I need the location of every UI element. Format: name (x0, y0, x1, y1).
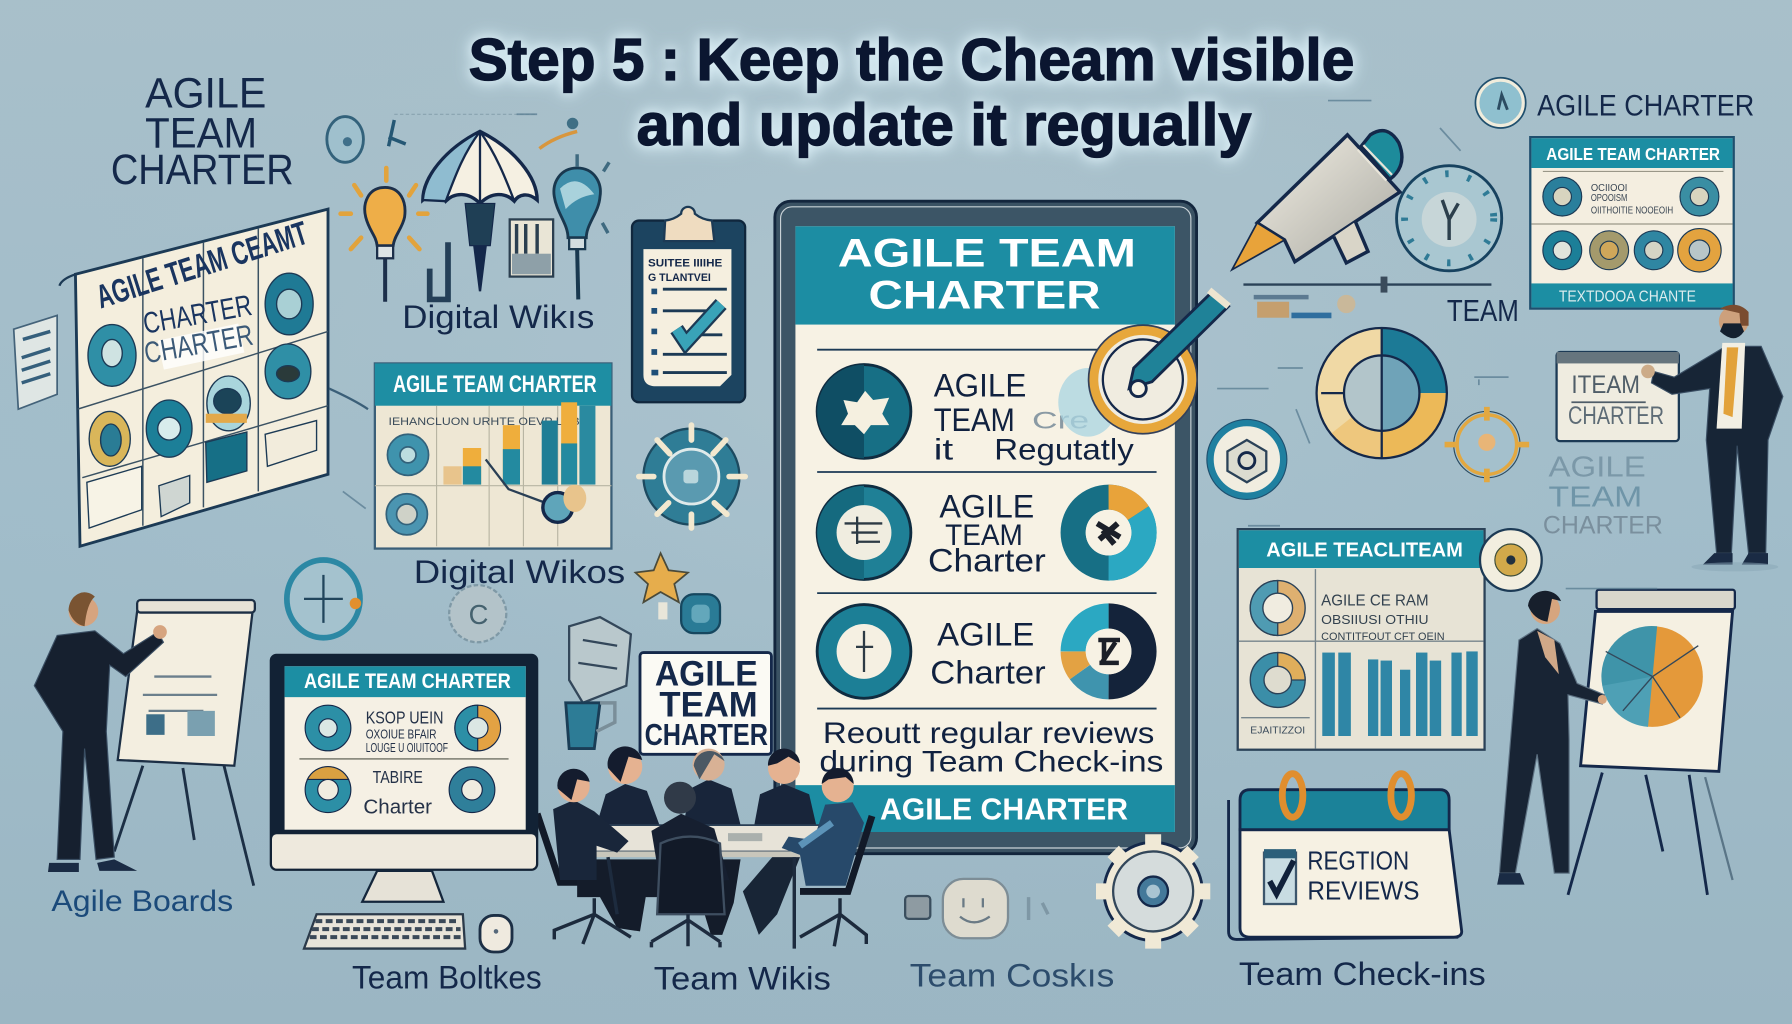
icon: compass (287, 560, 361, 638)
chairs and legs (537, 814, 872, 946)
icon: clock (1397, 166, 1502, 271)
calendar text (1307, 846, 1419, 905)
icon: keyboard (304, 914, 465, 949)
poster text (1591, 183, 1673, 217)
board header: AGILE TEAM CHARTER (393, 371, 597, 398)
tablet header (795, 226, 1175, 325)
table (577, 825, 840, 949)
report text (1321, 593, 1445, 643)
row 1: TEAM (934, 402, 1015, 438)
panel: wall poster (59, 209, 328, 546)
review text (819, 717, 1163, 778)
icon: circular target (1207, 419, 1287, 499)
monitor text: Charter (363, 796, 432, 819)
icon: teal tile (681, 594, 720, 633)
icon: agile charter badge (1475, 78, 1526, 128)
poster heading: AGILE TEAM CEAMT (92, 215, 312, 316)
label: agile charter: AGILE CHARTER (1537, 89, 1754, 122)
faded agile team charter text (1543, 452, 1663, 540)
left heading: agile team charter: TEAM (145, 109, 257, 156)
board circles (386, 434, 429, 535)
board text: IEHANCLUON URHTE OEVP LNBU (389, 416, 589, 428)
labels: bottom row (352, 956, 1486, 997)
monitor text: TABIRE (373, 767, 423, 787)
row 2: AGILE (939, 489, 1034, 525)
monitor text: KSOP UEIN (366, 707, 443, 727)
faded agile team charter text: AGILE (1549, 452, 1646, 484)
faded agile team charter text: CHARTER (1543, 512, 1663, 540)
icon: yellow light bulb (341, 168, 427, 302)
icon: pen and gold ring (1058, 290, 1229, 437)
row 2: Charter (928, 542, 1046, 578)
icon: megaphone (1232, 131, 1402, 270)
timeline with smudged marks (1243, 277, 1491, 318)
monitor text: OXOIUE BFAIR (366, 727, 437, 741)
row 1 (817, 365, 1134, 466)
poster text: OIITHOITIE NOOEOIH (1591, 206, 1673, 217)
panel: agile team sign: CHARTER (645, 717, 768, 752)
row 3: Charter (930, 654, 1046, 690)
report icons (1250, 581, 1305, 707)
report header: AGILE TEACLITEAM (1266, 539, 1463, 562)
icon: small smiley device (905, 879, 1048, 938)
poster charter text (141, 289, 256, 370)
poster charter text: CHARTER (142, 319, 256, 370)
tablet footer (795, 785, 1175, 832)
faded agile team charter text: TEAM (1549, 481, 1642, 513)
note: team charter: ITEAM (1571, 371, 1640, 399)
poster footer: TEXTDOOA CHANTE (1559, 289, 1696, 306)
flipchart left (114, 600, 255, 886)
title: Step 5 : Keep the Cheam visible (469, 26, 1354, 93)
panel: agile chart board (375, 363, 611, 549)
icon: umbrella (423, 131, 537, 291)
pie chart (1601, 626, 1703, 727)
icon: mug and gadget (566, 617, 631, 749)
labels: bottom row: Team Check-ins (1239, 956, 1486, 992)
person far left (597, 746, 663, 834)
row 3: AGILE (937, 617, 1034, 653)
calendar text: REVIEWS (1307, 875, 1419, 905)
icon: star (635, 553, 688, 619)
panel: top right poster (1530, 137, 1734, 309)
label: digital wikos: Digital Wikos (414, 554, 625, 590)
presenter left (34, 592, 167, 872)
left heading: agile team charter: AGILE (145, 69, 266, 116)
bar chart (443, 402, 595, 485)
row 1: Regutatly (994, 433, 1134, 466)
panel: desktop monitor (270, 654, 538, 902)
left heading: agile team charter: CHARTER (111, 146, 294, 193)
label: team: TEAM (1447, 293, 1519, 328)
person left (553, 769, 629, 880)
magnifier (486, 459, 586, 522)
donut chart: team (1317, 328, 1447, 458)
icon: clipboard checklist: G TLANTVEI (648, 272, 711, 284)
label: agile boards: Agile Boards (51, 885, 233, 918)
icon: gold target (1445, 407, 1529, 482)
icon: grey dial (449, 585, 506, 642)
icon: scribbled lens (327, 114, 578, 162)
labels: bottom row: Team Wikis (654, 961, 831, 997)
note: team charter (1557, 352, 1679, 441)
report text: CONTITFOUT CFT OEIN (1321, 631, 1445, 643)
presenter top right (1641, 305, 1783, 571)
icon: eye badge (1480, 529, 1542, 591)
poster icons (1543, 177, 1721, 272)
calendar: region reviews (1229, 774, 1462, 939)
panel: agile team sign (640, 653, 771, 754)
flipchart right with pie chart (1568, 590, 1735, 895)
icon: mouse (480, 915, 512, 952)
icon: grey dial: C (469, 599, 488, 630)
poster charter text: CHARTER (141, 289, 254, 341)
label: digital wikis: Digital Wikıs (402, 299, 594, 335)
review text: Reoutt regular reviews (823, 717, 1154, 750)
title (469, 26, 1354, 158)
left heading: agile team charter (111, 69, 294, 193)
team meeting table (537, 746, 872, 949)
poster header: AGILE TEAM CHARTER (1546, 144, 1721, 164)
icon: clipboard checklist (632, 207, 745, 402)
calendar text: REGTION (1307, 846, 1409, 876)
tablet footer: AGILE CHARTER (880, 791, 1128, 826)
row 2: TEAM (945, 519, 1023, 552)
row 3 (817, 605, 1144, 698)
donut chart row 3 (1073, 616, 1144, 687)
icon: blue light bulb (554, 154, 609, 299)
tablet header: CHARTER (869, 274, 1101, 318)
panel: central tablet (775, 201, 1197, 854)
person middle (683, 749, 741, 825)
poster icons (87, 273, 317, 528)
poster text: OPOOISM (1591, 193, 1627, 204)
row 1: it (934, 433, 954, 466)
calendar rings (1282, 774, 1411, 817)
title: and update it regually (637, 91, 1251, 158)
small scattered marks (343, 101, 1657, 589)
presenter bottom right (1497, 591, 1607, 885)
panel: agile team sign: TEAM (659, 685, 758, 725)
poster text: OCIIOOI (1591, 183, 1627, 194)
person far right (754, 749, 818, 834)
icon: clipboard checklist: SUITEE IIIIHE (648, 257, 723, 269)
person center back (651, 782, 729, 947)
icons: small tools (430, 219, 553, 299)
panel: bottom right report (1238, 529, 1485, 750)
report text: OBSIIUSI OTHIU (1321, 613, 1429, 627)
small note on wall (14, 315, 57, 409)
note: team charter: CHARTER (1568, 402, 1664, 430)
row 1: Cre (1032, 408, 1089, 435)
report text: AGILE CE RAM (1321, 593, 1429, 610)
panel: bottom right report: EJAITIZZOI (1250, 726, 1305, 737)
row 2 (817, 486, 1144, 579)
donut chart row 2 (1073, 497, 1144, 568)
row 1: AGILE (934, 368, 1026, 404)
labels: bottom row: Team Boltkes (352, 960, 542, 996)
connector: wall poster to board (329, 389, 368, 409)
review text: during Team Check-ins (819, 745, 1163, 778)
icon: cog (1096, 834, 1210, 949)
monitor icons (305, 705, 501, 813)
tablet header: AGILE TEAM (838, 231, 1136, 275)
checkbox (1264, 849, 1296, 904)
labels: bottom row: Team Coskıs (910, 957, 1114, 993)
icon: round gear dial (639, 425, 745, 528)
person right (782, 768, 864, 886)
report bar chart (1322, 651, 1478, 736)
monitor text (363, 707, 448, 819)
monitor header: AGILE TEAM CHARTER (304, 668, 511, 693)
monitor text: LOUGE U OIUITOOF (366, 741, 448, 755)
panel: agile team sign: AGILE (655, 654, 758, 694)
